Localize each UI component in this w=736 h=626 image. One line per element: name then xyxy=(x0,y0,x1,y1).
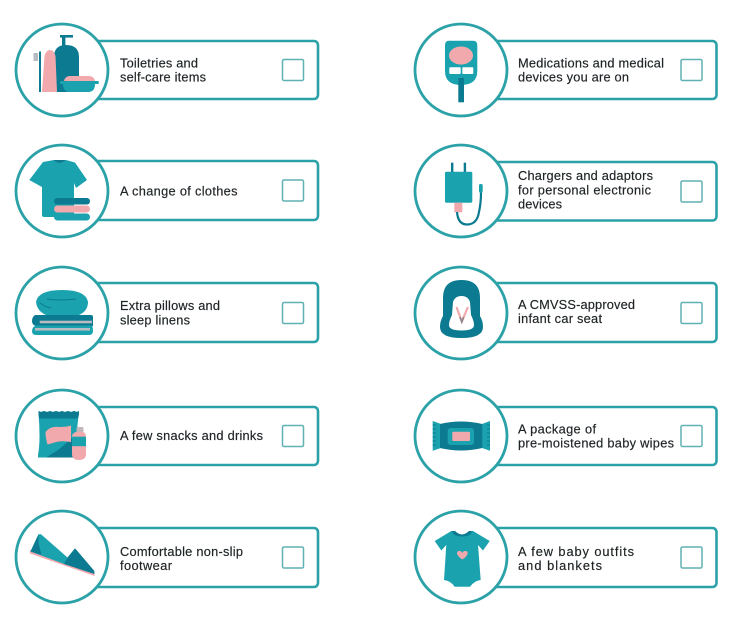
label panel xyxy=(70,41,318,99)
icon: toiletries xyxy=(34,35,99,92)
icon circle xyxy=(16,24,108,116)
icon: baby onesie xyxy=(435,531,490,587)
text: baby outfits: A few baby outfits xyxy=(518,544,634,559)
icon: infant car seat xyxy=(440,280,483,338)
checkbox xyxy=(681,547,702,568)
item: toiletries xyxy=(16,24,318,116)
text: clothes: A change of clothes xyxy=(120,184,238,199)
text: pillows: Extra pillows and xyxy=(120,298,220,313)
icon circle xyxy=(415,511,507,603)
icon circle xyxy=(415,145,507,237)
label panel xyxy=(70,407,318,465)
text: toiletries: Toiletries and xyxy=(120,55,198,70)
label panel xyxy=(70,283,318,342)
icon: shoe xyxy=(30,534,94,576)
icon: wipes package xyxy=(433,421,490,451)
checkbox xyxy=(282,547,304,568)
label panel xyxy=(470,407,716,465)
icon: snack bag and bottle xyxy=(38,411,86,460)
item: car seat xyxy=(415,267,716,359)
text: wipes: A package of xyxy=(518,421,596,436)
label panel xyxy=(470,162,716,220)
item: wipes xyxy=(415,390,716,482)
text: snacks: A few snacks and drinks xyxy=(120,428,263,443)
item: medications xyxy=(415,24,716,116)
item: snacks xyxy=(16,390,318,482)
checkbox xyxy=(282,426,304,446)
icon: charger xyxy=(445,163,483,224)
icon circle xyxy=(415,390,507,482)
item: footwear xyxy=(16,511,318,603)
text: pillows line two: sleep linens xyxy=(120,312,190,327)
text: footwear line two: footwear xyxy=(120,558,173,573)
item: baby outfits xyxy=(415,511,716,603)
icon: pillow and linens xyxy=(32,290,93,335)
text: car seat line two: infant car seat xyxy=(518,311,602,326)
text: chargers line two: for personal electronic xyxy=(518,182,652,197)
text: medications line two: devices you are on xyxy=(518,69,629,84)
icon: glucose meter xyxy=(445,41,477,102)
icon circle xyxy=(16,390,108,482)
label panel xyxy=(470,283,716,342)
checkbox xyxy=(282,180,304,201)
text: chargers line three: devices xyxy=(518,197,562,212)
icon circle xyxy=(16,145,108,237)
icon circle xyxy=(415,24,507,116)
checkbox xyxy=(681,60,702,80)
text: chargers: Chargers and adaptors xyxy=(518,168,653,183)
label panel xyxy=(470,41,716,99)
label panel xyxy=(470,528,716,587)
label panel xyxy=(70,161,318,220)
icon circle xyxy=(16,267,108,359)
checkbox xyxy=(681,181,702,202)
item: chargers xyxy=(415,145,716,237)
checkbox xyxy=(282,302,304,324)
checkbox xyxy=(282,60,304,80)
text: footwear: Comfortable non-slip xyxy=(120,544,243,559)
text: wipes line two: pre-moistened baby wipes xyxy=(518,436,674,451)
icon circle xyxy=(16,511,108,603)
icon circle xyxy=(415,267,507,359)
label panel xyxy=(70,528,318,587)
checkbox xyxy=(681,426,702,446)
checkbox xyxy=(681,302,702,324)
text: toiletries line two: self-care items xyxy=(120,69,206,84)
text: baby outfits line two: and blankets xyxy=(518,558,602,573)
item: clothes xyxy=(16,145,318,237)
icon: t-shirt and folded clothes xyxy=(29,160,90,220)
item: pillows xyxy=(16,267,318,359)
text: car seat: A CMVSS-approved xyxy=(518,297,635,312)
text: medications: Medications and medical xyxy=(518,55,664,70)
